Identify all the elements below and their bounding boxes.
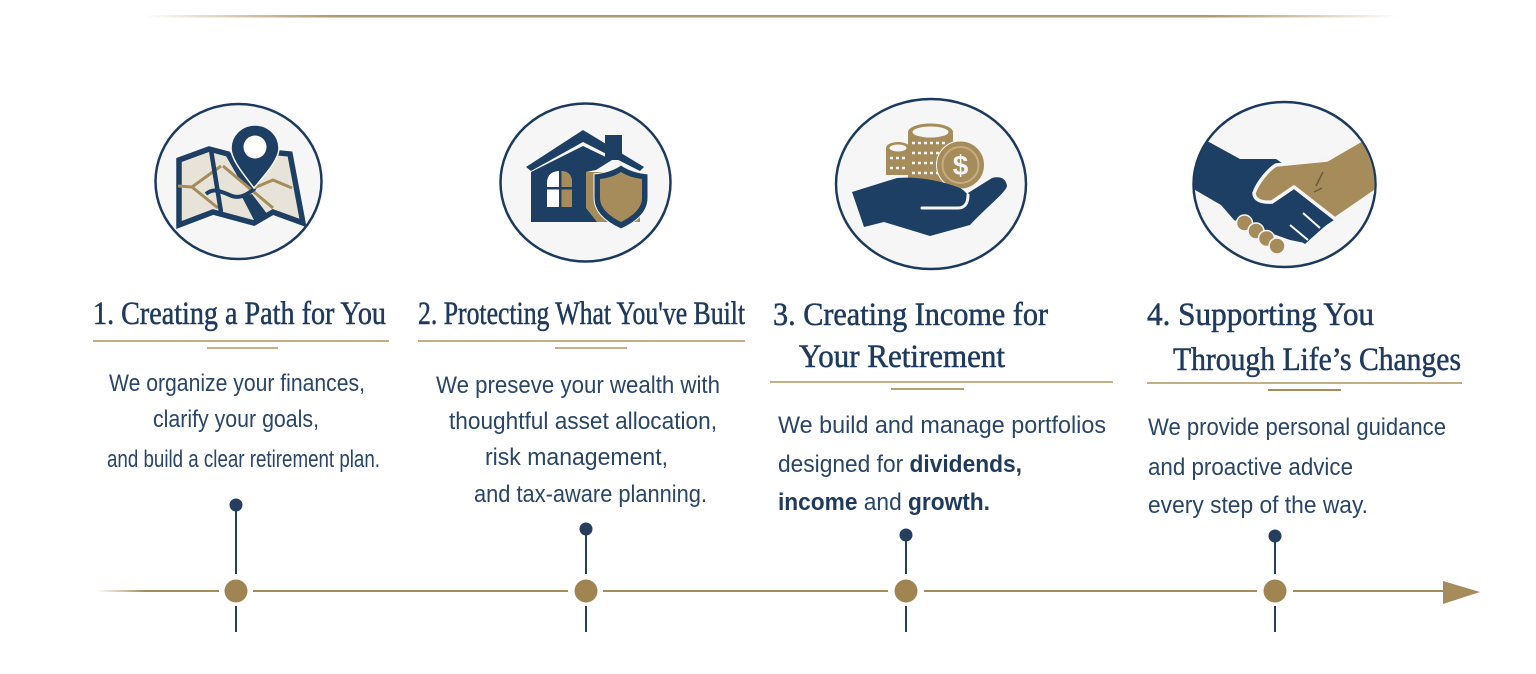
timeline segments [97, 590, 1445, 592]
heading: 2. Protecting What You've Built [418, 296, 745, 332]
heading: 1. Creating a Path for You [93, 296, 386, 332]
icon: map with location pin [156, 104, 322, 259]
description: We preseve your wealth with [436, 372, 720, 399]
panel: step 2 [418, 104, 745, 508]
description: We provide personal guidance [1148, 414, 1446, 441]
panel: step 3 [770, 99, 1113, 516]
description: and proactive advice [1148, 454, 1353, 481]
icon: hand holding coins: $ [953, 150, 969, 181]
heading: Your Retirement [799, 339, 1005, 375]
timeline with arrow [97, 498, 1480, 632]
heading: 4. Supporting You [1147, 297, 1374, 333]
heading: 3. Creating Income for [773, 297, 1048, 333]
heading rule [770, 381, 1113, 390]
description: risk management, [485, 444, 668, 471]
icon: handshake [1190, 102, 1380, 267]
description: and build a clear retirement plan. [107, 446, 380, 473]
heading: Through Life’s Changes [1173, 342, 1461, 378]
description: and tax-aware planning. [474, 481, 707, 508]
panel: step 1 [93, 104, 389, 473]
description: clarify your goals, [153, 406, 319, 433]
description: We organize your finances, [109, 370, 365, 397]
description [1148, 414, 1446, 519]
description [436, 372, 720, 508]
heading [1147, 297, 1461, 378]
milestone 4 [1264, 530, 1286, 632]
panel: step 4 [1147, 102, 1462, 519]
heading rule [1147, 382, 1462, 391]
icon: hand holding coins [836, 99, 1026, 269]
arrow head [1443, 581, 1480, 604]
description [107, 370, 380, 473]
description: designed for dividends, [778, 451, 1022, 478]
top decorative rule [145, 15, 1397, 18]
description: thoughtful asset allocation, [449, 408, 717, 435]
description: We build and manage portfolios [778, 412, 1106, 439]
heading rule [418, 340, 745, 349]
description: income and growth. [778, 489, 990, 516]
description: every step of the way. [1148, 492, 1368, 519]
heading rule [93, 340, 389, 349]
milestone 3 [894, 528, 918, 632]
icon: house with shield [500, 104, 670, 262]
description [778, 412, 1106, 516]
milestone 2 [574, 522, 598, 632]
heading [773, 297, 1048, 375]
milestone 1 [224, 498, 248, 632]
